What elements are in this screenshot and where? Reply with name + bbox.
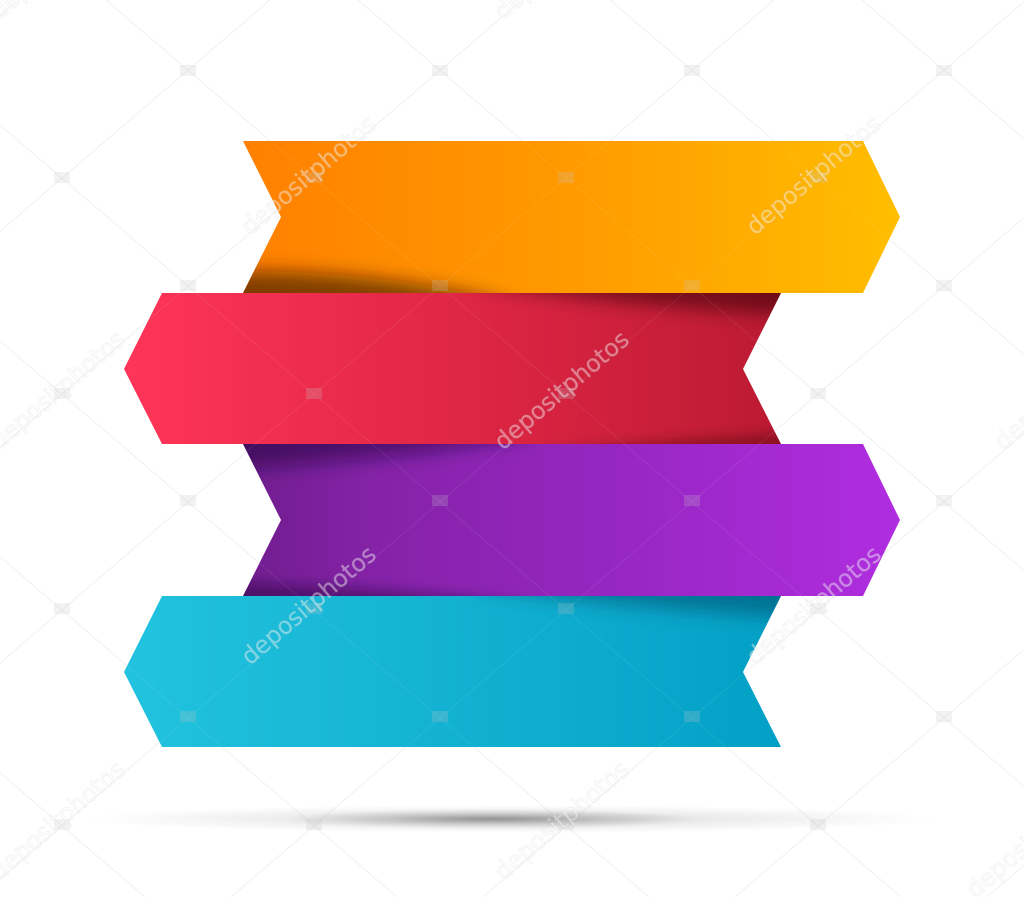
watermark text: depositphotos: [489, 755, 635, 886]
watermark text: depositphotos: [236, 110, 382, 241]
watermark text: depositphotos: [236, 540, 382, 671]
banner: orange arrow: [243, 141, 900, 293]
watermark text: depositphotos: [489, 325, 635, 456]
watermark camera icons: [54, 65, 952, 830]
watermark text: depositphotos: [741, 540, 887, 671]
banner: red arrow: [124, 293, 781, 444]
banner: purple arrow: [243, 444, 900, 596]
watermark text: depositphotos: [741, 110, 887, 241]
banner: blue arrow: [124, 596, 781, 747]
ground shadow: [80, 805, 940, 833]
